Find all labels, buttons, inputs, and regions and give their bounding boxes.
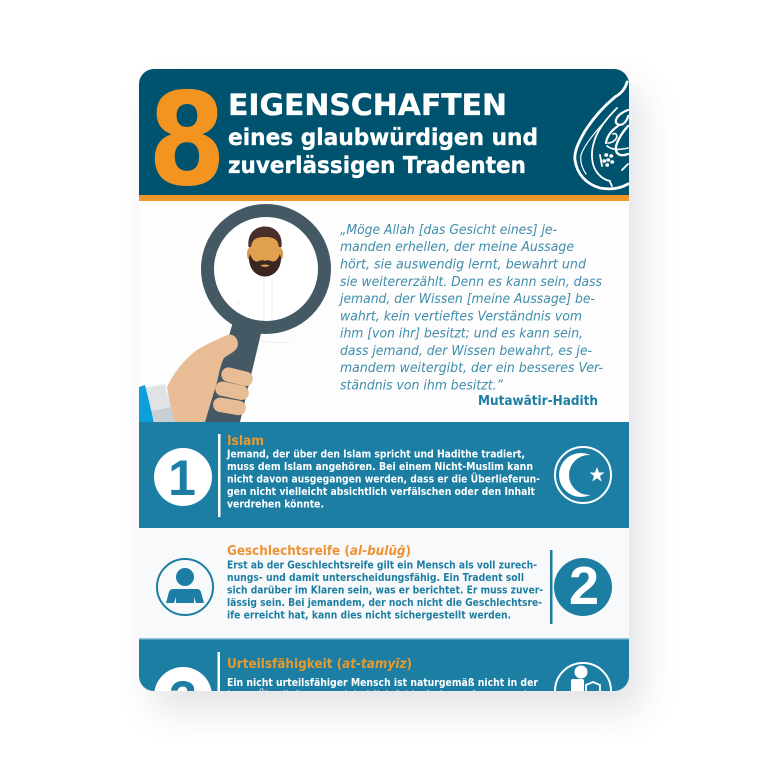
number 3 — [154, 667, 212, 727]
text block: Jemand, der über den Islam spricht und Hadithe tradiert, — [226, 448, 525, 460]
text block — [226, 448, 540, 510]
heading: Urteilsfähigkeit (at-tamyīz) — [227, 657, 412, 672]
text block — [227, 676, 539, 702]
text block: lässig sein. Bei jemandem, der noch nicht die Geschlechtsre- — [227, 596, 542, 609]
text block: verdrehen könnte. — [227, 498, 324, 510]
sleeve — [139, 385, 154, 422]
hadith quote: wahrt, kein vertieftes Verständnis vom — [340, 310, 582, 324]
hadith quote: jemand, der Wissen [meine Aussage] be- — [338, 292, 595, 307]
title: zuverlässigen Tradenten — [228, 151, 526, 179]
number 1 — [154, 448, 212, 506]
infographic card — [139, 69, 629, 691]
icon: calligraphy — [575, 82, 628, 189]
hadith quote — [338, 223, 603, 394]
hadith quote: mandem weitergibt, der ein besseres Ver- — [340, 361, 603, 376]
title: EIGENSCHAFTEN — [228, 88, 507, 122]
icon: crescent and star — [555, 447, 611, 503]
hadith quote: ihm [von ihr] besitzt; und es kann sein, — [340, 326, 583, 342]
number 2: 2 — [569, 556, 599, 616]
shirt cuff — [145, 384, 171, 411]
title: eines glaubwürdigen und — [228, 123, 538, 151]
fingers — [212, 366, 254, 416]
text block: Ein nicht urteilsfähiger Mensch ist naturgemäß nicht in der — [227, 676, 539, 689]
text block: nungs- und damit unterscheidungsfähig. Ein Tradent soll — [227, 571, 524, 584]
hadith quote: manden erhellen, der meine Aussage — [340, 240, 574, 255]
panel: 3 Urteilsfähigkeit — [139, 640, 629, 727]
big number 8: 8 — [148, 69, 226, 215]
text block: muss dem Islam angehören. Bei einem Nicht-Muslim kann — [227, 460, 533, 473]
number 2 — [554, 556, 612, 616]
heading: Islam — [227, 434, 264, 449]
heading: Geschlechtsreife (al-bulūġ) — [227, 544, 411, 559]
panel: header — [139, 66, 629, 215]
panel: 1 Islam — [139, 422, 629, 528]
icon: person with shield — [555, 663, 611, 719]
icon: person — [157, 559, 213, 615]
panel: 2 Geschlechtsreife — [139, 528, 629, 640]
text block: nicht davon ausgegangen werden, dass er die Überlieferun- — [227, 472, 540, 486]
hadith quote: hört, sie auswendig lernt, bewahrt und — [340, 258, 587, 272]
number 1: 1 — [168, 450, 196, 506]
illustration: hand with magnifying glass — [139, 210, 324, 422]
magnifier ring — [208, 210, 324, 328]
icon: bearded man — [214, 217, 318, 343]
hadith quote: „Möge Allah [das Gesicht eines] je- — [340, 223, 557, 238]
magnifier handle — [204, 322, 262, 422]
hadith quote: sie weitererzählt. Denn es kann sein, dass — [340, 275, 602, 290]
quote source: Mutawātir-Hadith — [478, 394, 598, 409]
hadith quote: ständnis von ihm besitzt.” — [340, 378, 503, 394]
hand — [167, 335, 238, 422]
title — [228, 88, 538, 179]
text block: gen nicht vielleicht absichtlich verfälschen oder den Inhalt — [227, 485, 535, 498]
text block: sich darüber im Klaren sein, was er berichtet. Er muss zuver- — [227, 584, 543, 596]
hadith quote: dass jemand, der Wissen bewahrt, es je- — [340, 344, 592, 359]
text block: ife erreicht hat, kann dies nicht sichergestellt werden. — [227, 608, 511, 622]
text block — [227, 558, 543, 622]
panel: quote section — [139, 201, 629, 422]
text block: Erst ab der Geschlechtsreife gilt ein Mensch als voll zurech- — [227, 558, 537, 572]
